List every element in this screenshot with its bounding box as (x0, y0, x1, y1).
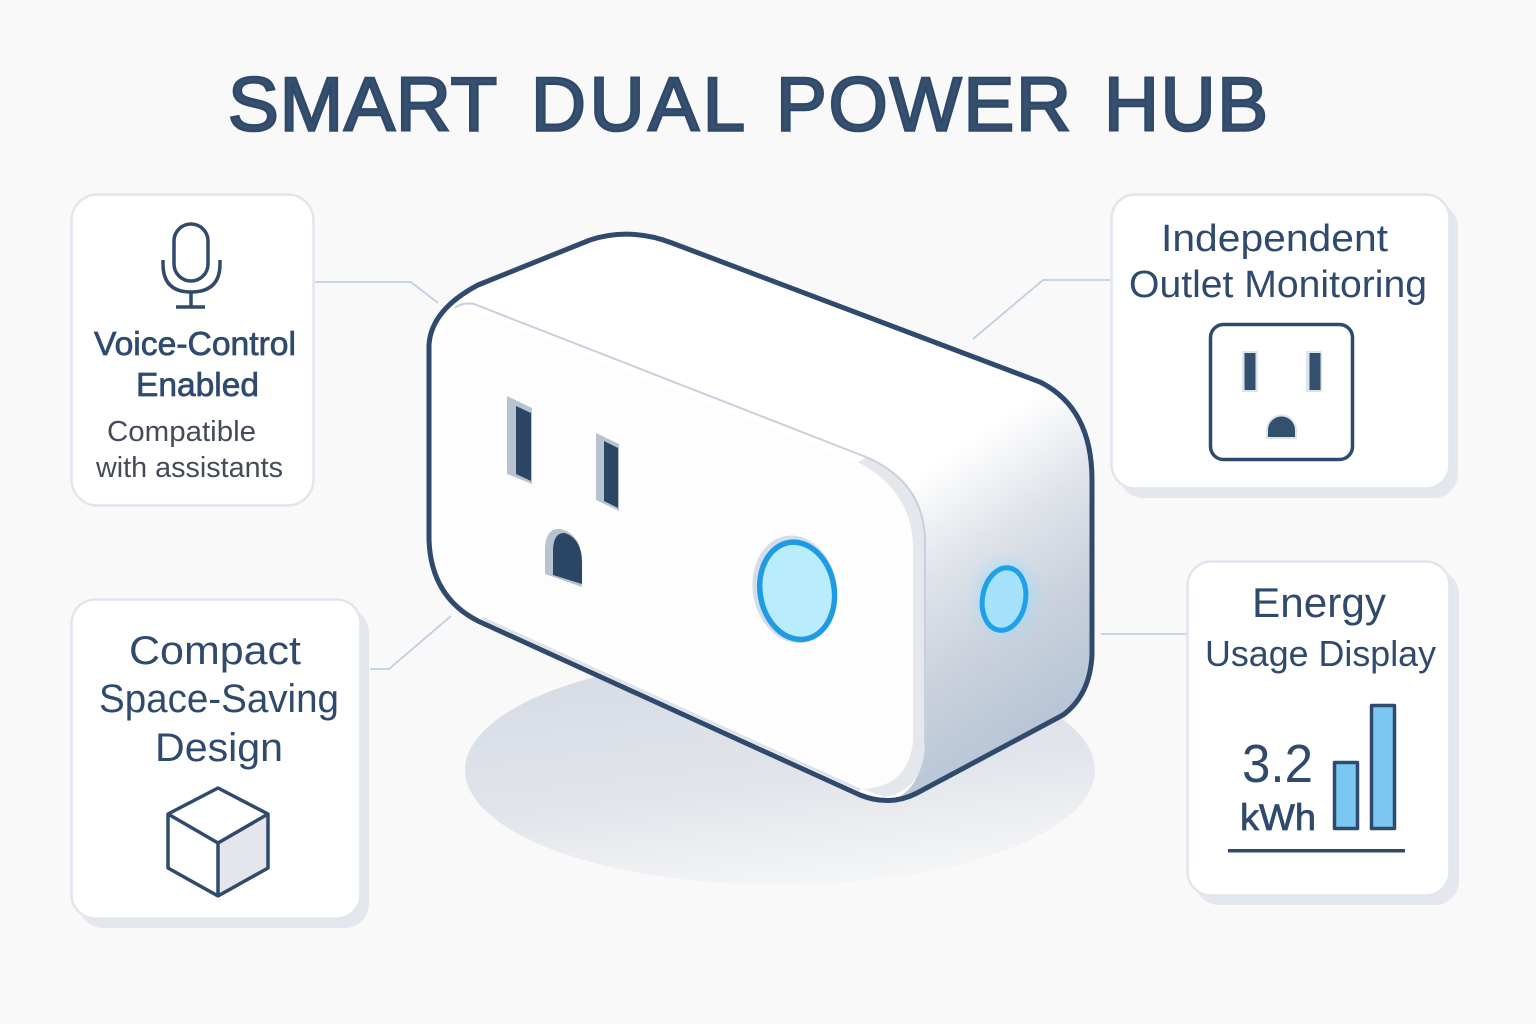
panel: voice control: with assistants (95, 452, 283, 484)
icon: microphone (163, 224, 220, 307)
panel: energy usage: Usage Display (1205, 633, 1436, 674)
device front right band (858, 457, 925, 797)
panel: compact design (72, 600, 369, 928)
panel: outlet monitoring: Outlet Monitoring (1129, 264, 1427, 306)
icon: cube (168, 788, 268, 896)
panel: voice control (72, 194, 314, 506)
device front face (440, 310, 913, 788)
baseline (1228, 849, 1405, 852)
side LED (977, 564, 1031, 634)
heading: voice control: Voice-Control (94, 325, 296, 362)
smart plug device (429, 234, 1092, 801)
panel: compact design: Space-Saving (99, 677, 339, 721)
panel: energy usage: kWh (1240, 797, 1316, 838)
title: HUB (1104, 62, 1268, 148)
device body (429, 234, 1092, 801)
device shadow (465, 655, 1095, 885)
side LED glow (975, 560, 1037, 636)
connector lines (315, 280, 1187, 669)
front button (744, 529, 846, 650)
heading: outlet monitoring: Independent (1161, 218, 1388, 260)
bar chart (1334, 706, 1394, 828)
outlet slot left (507, 396, 532, 484)
icon: outlet (1210, 324, 1352, 460)
title: DUAL (531, 62, 745, 148)
panel: energy usage (1188, 562, 1459, 905)
heading: compact design: Compact (129, 629, 301, 673)
device outline (429, 234, 1092, 801)
reading: 3.2 kWh: 3.2 (1242, 734, 1313, 794)
panel: compact design: Design (155, 726, 283, 770)
description: voice control: Compatible (107, 416, 256, 448)
outlet ground hole (545, 529, 582, 587)
panel: outlet monitoring (1112, 194, 1458, 498)
panel: voice control: Enabled (136, 366, 259, 403)
title (228, 62, 1268, 148)
outlet slot right (596, 433, 619, 511)
device lower edge band (482, 618, 860, 790)
title: SMART (228, 62, 497, 148)
heading: energy usage: Energy (1252, 579, 1386, 626)
device top edge line (455, 304, 925, 745)
title: POWER (776, 62, 1071, 148)
device side face (866, 348, 1092, 800)
